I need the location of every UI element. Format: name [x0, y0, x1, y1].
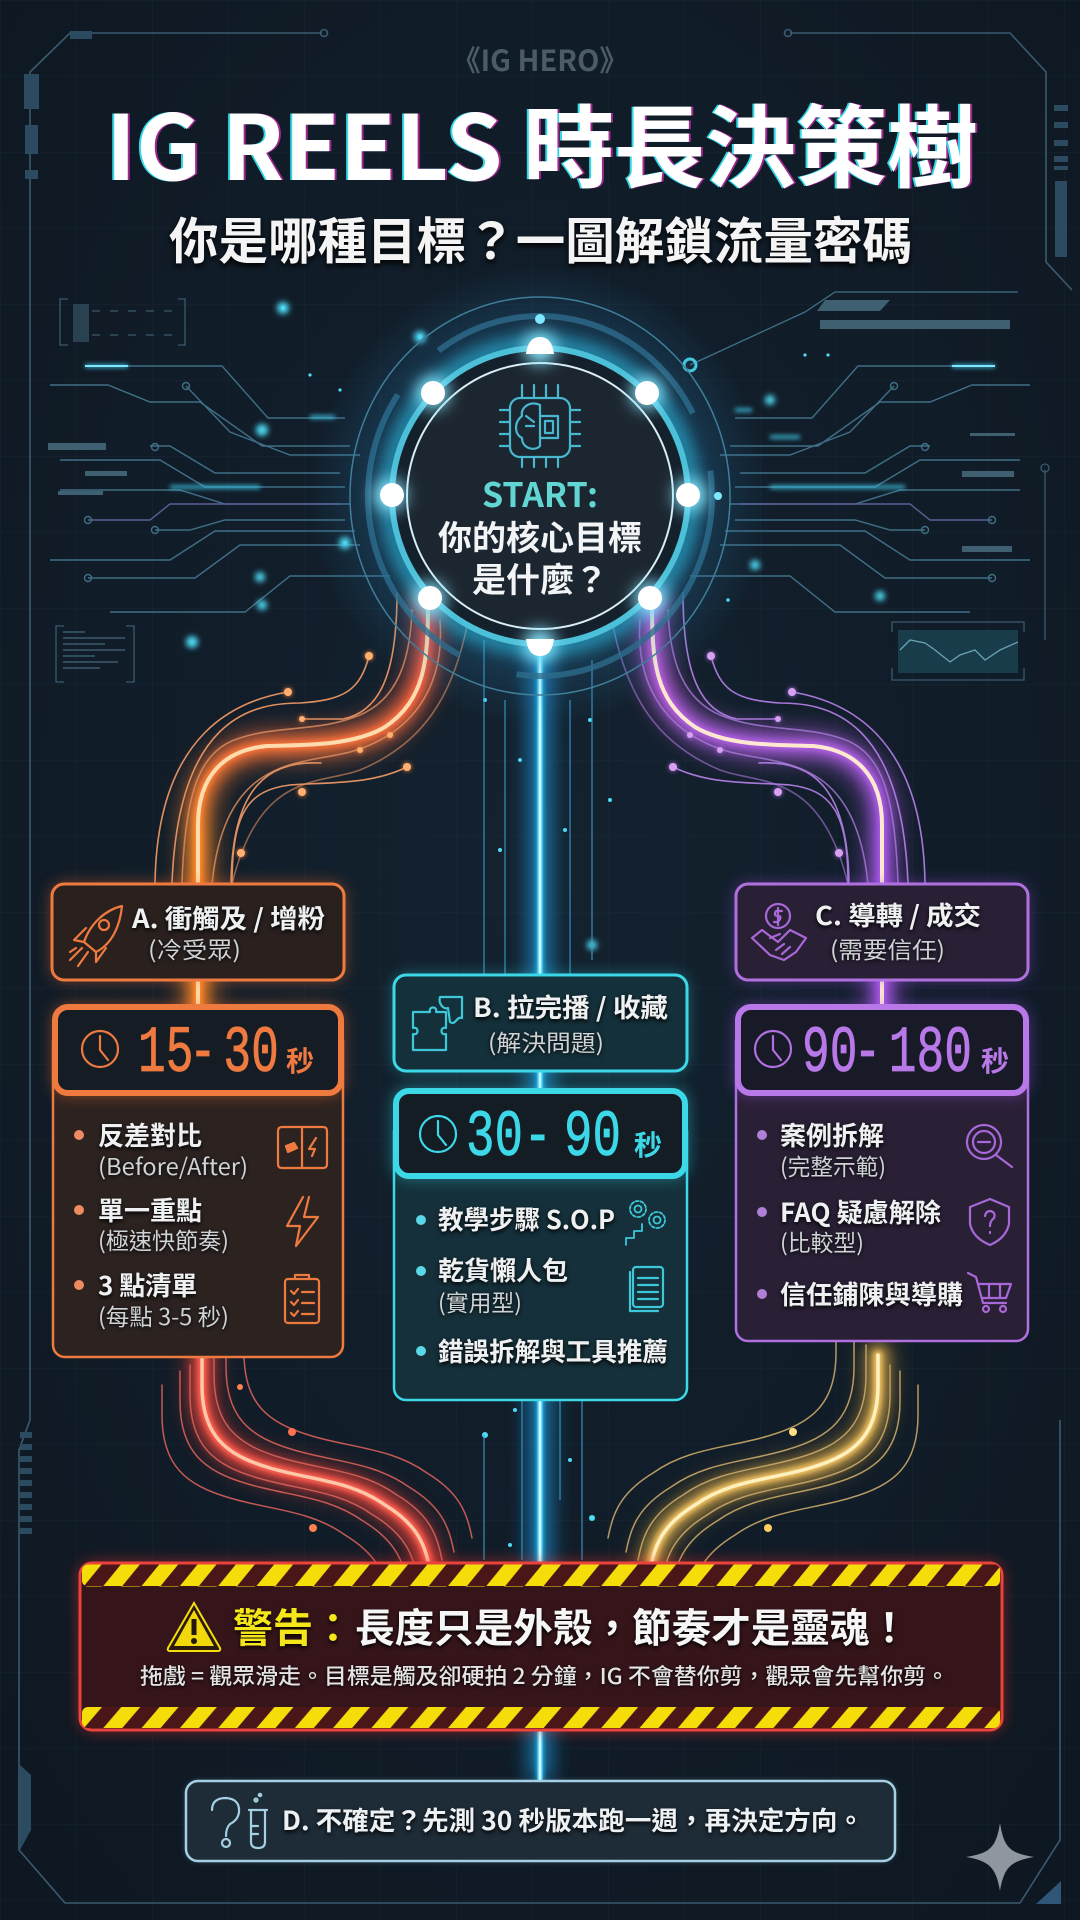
- start node: 你的核心目標: [438, 511, 642, 560]
- duration: B: [394, 1089, 687, 1177]
- panel: A header: (冷受眾): [148, 931, 241, 965]
- icon: warning triangle: [168, 1603, 220, 1651]
- start node: [310, 266, 770, 726]
- icon: handshake money: [752, 904, 806, 960]
- branch: orange path to A: [155, 593, 470, 1004]
- brand label: 《IG HERO》: [452, 38, 628, 80]
- list: A: (極速快節奏): [98, 1222, 229, 1256]
- icon: brain chip: [500, 385, 580, 467]
- list: C: (比較型): [780, 1224, 864, 1258]
- list: B: 乾貨懶人包: [438, 1251, 568, 1288]
- panel: C header: (需要信任): [830, 931, 945, 965]
- icon: question and test tube: [212, 1794, 267, 1848]
- branch: red path from A: [162, 1323, 472, 1600]
- icon: shield: [970, 1199, 1009, 1245]
- duration: A: 15 - 30: [138, 1018, 279, 1092]
- subtitle: 你是哪種目標？一圖解鎖流量密碼: [169, 202, 912, 274]
- list: C: [757, 1116, 963, 1312]
- icon: puzzle: [413, 997, 462, 1050]
- list: C: (完整示範): [780, 1148, 886, 1182]
- circuit traces: [50, 366, 1030, 612]
- list: A: (每點 3-5 秒): [98, 1298, 229, 1332]
- panel: D note: [186, 1781, 895, 1861]
- icon: checklist: [285, 1275, 319, 1323]
- panel: A header: [52, 884, 344, 980]
- list: C: 案例拆解: [780, 1116, 884, 1153]
- list: A: 單一重點: [98, 1191, 202, 1228]
- icon: rocket: [70, 906, 122, 966]
- list: B: (實用型): [438, 1284, 522, 1318]
- corner accent: [1036, 1881, 1061, 1904]
- duration: C: 秒: [981, 1040, 1009, 1080]
- duration: A: [54, 1006, 342, 1094]
- blue particles: [186, 302, 885, 1547]
- warning detail: 拖戲 = 觀眾滑走。目標是觸及卻硬拍 2 分鐘，IG 不會替你剪，觀眾會先幫你剪。: [140, 1659, 949, 1691]
- list: C: 信任鋪陳與導購: [780, 1275, 963, 1312]
- panel: warning: 長度只是外殼，節奏才是靈魂！: [355, 1596, 909, 1654]
- title: IG REELS 時長決策樹: [106, 76, 978, 206]
- duration: C: [736, 1006, 1028, 1094]
- list: B: 教學步驟 S.O.P: [438, 1200, 615, 1237]
- branch: gold path from C: [608, 1323, 918, 1600]
- panel: A details: [53, 1006, 343, 1357]
- list: A: (Before/After): [98, 1148, 248, 1182]
- list: A: 3 點清單: [98, 1266, 197, 1303]
- panel: C header: C. 導轉 / 成交: [815, 896, 981, 933]
- branch: purple path to C: [610, 593, 925, 1004]
- panel: C header: [736, 884, 1028, 980]
- decorative tech widgets: [48, 292, 1049, 682]
- duration: A: 秒: [286, 1040, 314, 1080]
- panel: B header: B. 拉完播 / 收藏: [473, 988, 668, 1025]
- center stem: [484, 630, 592, 1780]
- duration: B: 秒: [634, 1124, 662, 1164]
- icon: before after: [278, 1127, 327, 1168]
- start node: 是什麼？: [472, 553, 608, 602]
- panel: warning: [80, 1563, 1002, 1730]
- icon: lightning: [287, 1197, 318, 1246]
- list: C: FAQ 疑慮解除: [780, 1193, 941, 1230]
- panel: A header: A. 衝觸及 / 增粉: [131, 899, 325, 936]
- panel: C details: [736, 1006, 1028, 1341]
- panel: B details: [394, 1089, 687, 1400]
- list: A: [74, 1116, 248, 1332]
- list: B: [416, 1200, 668, 1369]
- duration: B: 30 - 90: [466, 1101, 621, 1176]
- start text: START:: [482, 468, 598, 517]
- panel: D note: D. 不確定？先測 30 秒版本跑一週，再決定方向。: [282, 1801, 864, 1838]
- panel: B header: [394, 975, 687, 1071]
- panel: B header: (解決問題): [488, 1024, 604, 1058]
- list: A: 反差對比: [98, 1116, 202, 1153]
- duration: C: 90 - 180: [802, 1018, 972, 1092]
- icon: magnifier: [967, 1125, 1012, 1167]
- icon: documents: [630, 1267, 663, 1311]
- icon: cart: [968, 1273, 1011, 1312]
- sparkle watermark: [966, 1823, 1034, 1891]
- warning headline: 警告：: [233, 1596, 353, 1654]
- list: B: 錯誤拆解與工具推薦: [438, 1332, 668, 1369]
- ring nodes: [374, 332, 706, 661]
- icon: gears steps: [626, 1201, 665, 1245]
